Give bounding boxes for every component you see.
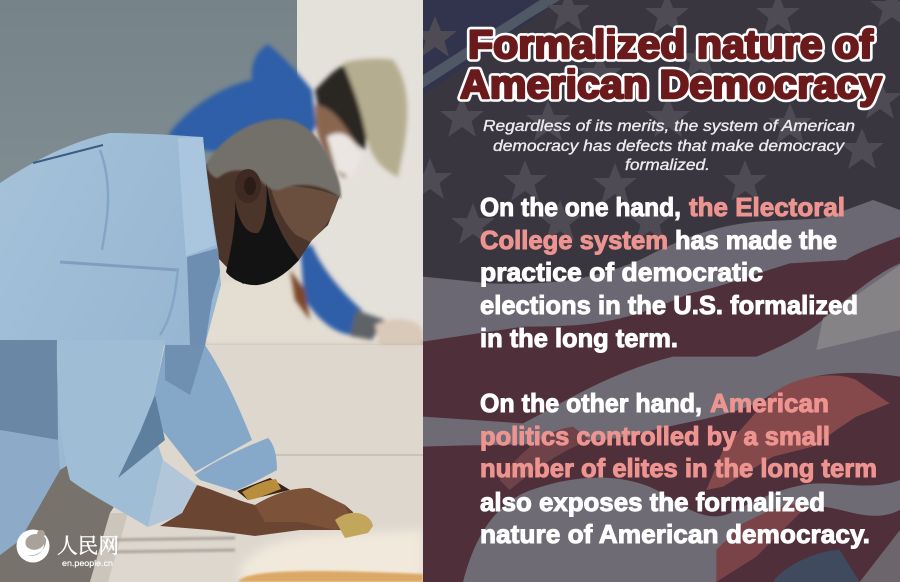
logo url: en.people.cn xyxy=(62,558,113,568)
text block: political elites paragraph: also exposes the formalized xyxy=(480,487,825,517)
forearms and hands xyxy=(160,478,373,538)
shirt cuffs xyxy=(148,438,277,527)
near sleeve xyxy=(57,340,165,527)
figure: man in denim shirt and black mask xyxy=(0,119,373,555)
text block: Electoral College paragraph: On the one hand, xyxy=(480,192,681,222)
panel: photo of masked election workers counting ballots xyxy=(0,0,423,582)
title line two: American Democracy xyxy=(460,63,883,107)
logo: People's Daily Online xyxy=(16,530,119,568)
torso shadow xyxy=(0,340,58,440)
gold watch xyxy=(242,479,281,500)
text block: Electoral College paragraph xyxy=(480,192,858,353)
black face mask xyxy=(226,183,299,285)
subtitle: Regardless of its merits, the system of American xyxy=(483,118,855,135)
text block: political elites paragraph: politics controlled by a small xyxy=(480,421,830,451)
text block: political elites paragraph: American xyxy=(710,388,829,418)
logo mark xyxy=(16,530,50,562)
denim shirt body and sleeves xyxy=(0,133,252,555)
text block: Electoral College paragraph: College system xyxy=(480,225,668,255)
text block: Electoral College paragraph: elections in the U.S. formalized xyxy=(480,290,858,320)
logo Chinese wordmark: 人民网 xyxy=(57,530,119,560)
text block: political elites paragraph xyxy=(480,388,877,549)
text block: Electoral College paragraph: practice of democratic xyxy=(480,257,763,287)
subtitle: democracy has defects that make democracy xyxy=(493,138,845,155)
subtitle: formalized. xyxy=(625,157,710,174)
title line one: Formalized nature of xyxy=(468,23,874,67)
man's head with gray hair xyxy=(206,119,341,284)
flag stripes xyxy=(423,200,900,582)
subtitle xyxy=(483,118,855,174)
title xyxy=(460,23,883,107)
text block: political elites paragraph: number of elites in the long term xyxy=(480,453,877,483)
figure: blurred worker in blue jacket and cap xyxy=(168,44,423,345)
text block: Electoral College paragraph: has made the xyxy=(675,225,837,255)
panel: American flag background xyxy=(408,0,900,582)
title line one: Formalized nature of xyxy=(468,23,874,67)
text block: Electoral College paragraph: in the long term. xyxy=(480,323,678,353)
far sleeve xyxy=(150,345,252,472)
text block: Electoral College paragraph: the Electoral xyxy=(689,192,845,222)
title line two: American Democracy xyxy=(460,63,883,107)
text block: political elites paragraph: On the other hand, xyxy=(480,388,702,418)
text block: political elites paragraph: nature of American democracy. xyxy=(480,519,870,549)
